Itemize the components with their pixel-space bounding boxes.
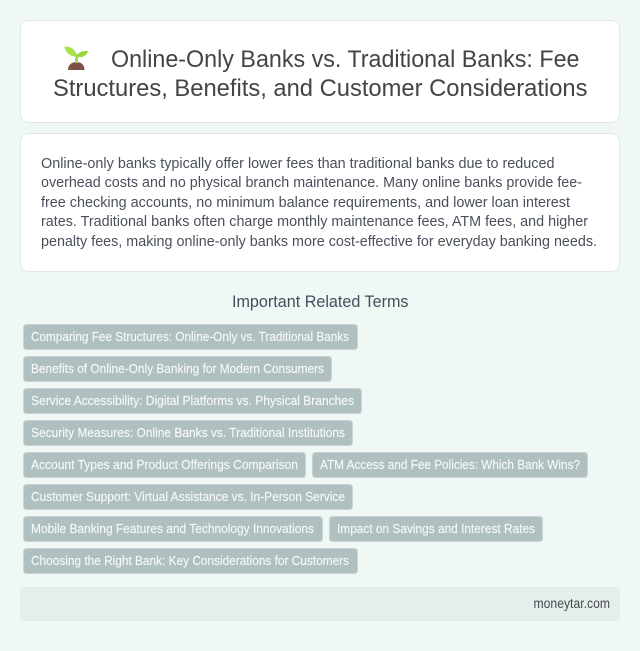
title: Online-Only Banks vs. Traditional Banks: Fee <box>111 46 580 73</box>
tag: atm access: ATM Access and Fee Policies: Which Bank Wins? <box>320 457 580 472</box>
tag: comparing fee structures <box>24 324 358 350</box>
tag: choosing the right bank <box>24 548 358 574</box>
tag: comparing fee structures: Comparing Fee Structures: Online-Only vs. Traditional Banks <box>31 329 349 344</box>
panel: summary card <box>20 134 620 272</box>
summary text block: Online-only banks typically offer lower fees than traditional banks due to reduced <box>41 155 554 172</box>
icon: sprout <box>64 46 88 70</box>
title: Structures, Benefits, and Customer Considerations <box>53 75 588 102</box>
tag: security measures <box>24 420 352 446</box>
title <box>53 46 588 102</box>
tag: choosing the right bank: Choosing the Right Bank: Key Considerations for Customers <box>31 553 349 568</box>
tag: atm access <box>312 452 588 478</box>
tag: account types: Account Types and Product Offerings Comparison <box>31 457 298 472</box>
panel: title card <box>20 20 620 122</box>
tag: mobile banking <box>24 516 322 542</box>
tag: account types <box>24 452 306 478</box>
summary text block: rates. Traditional banks often charge monthly maintenance fees, ATM fees, and higher <box>41 213 588 230</box>
footer <box>20 587 620 621</box>
panel: related terms tags <box>24 324 588 574</box>
summary text block: overhead costs and no physical branch maintenance. Many online banks provide fee- <box>41 174 582 191</box>
tag: customer support: Customer Support: Virtual Assistance vs. In-Person Service <box>31 489 345 504</box>
summary text block: penalty fees, making online-only banks more cost-effective for everyday banking needs. <box>41 233 597 250</box>
tag: benefits of online-only banking: Benefits of Online-Only Banking for Modern Consumers <box>31 361 324 376</box>
tag: service accessibility: Service Accessibility: Digital Platforms vs. Physical Branches <box>31 393 354 408</box>
tag: customer support <box>24 484 352 510</box>
tag: impact on savings <box>330 516 542 542</box>
heading: important related terms: Important Related Terms <box>232 293 408 311</box>
tag: service accessibility <box>24 388 362 414</box>
tag: security measures: Security Measures: Online Banks vs. Traditional Institutions <box>31 425 345 440</box>
tag: mobile banking: Mobile Banking Features and Technology Innovations <box>31 521 314 536</box>
tag: impact on savings: Impact on Savings and Interest Rates <box>337 521 535 536</box>
tag: benefits of online-only banking <box>24 356 332 382</box>
summary text block: free checking accounts, no minimum balance requirements, and lower loan interest <box>41 194 571 211</box>
summary text block <box>41 155 597 250</box>
footer source text: moneytar.com <box>534 596 610 611</box>
